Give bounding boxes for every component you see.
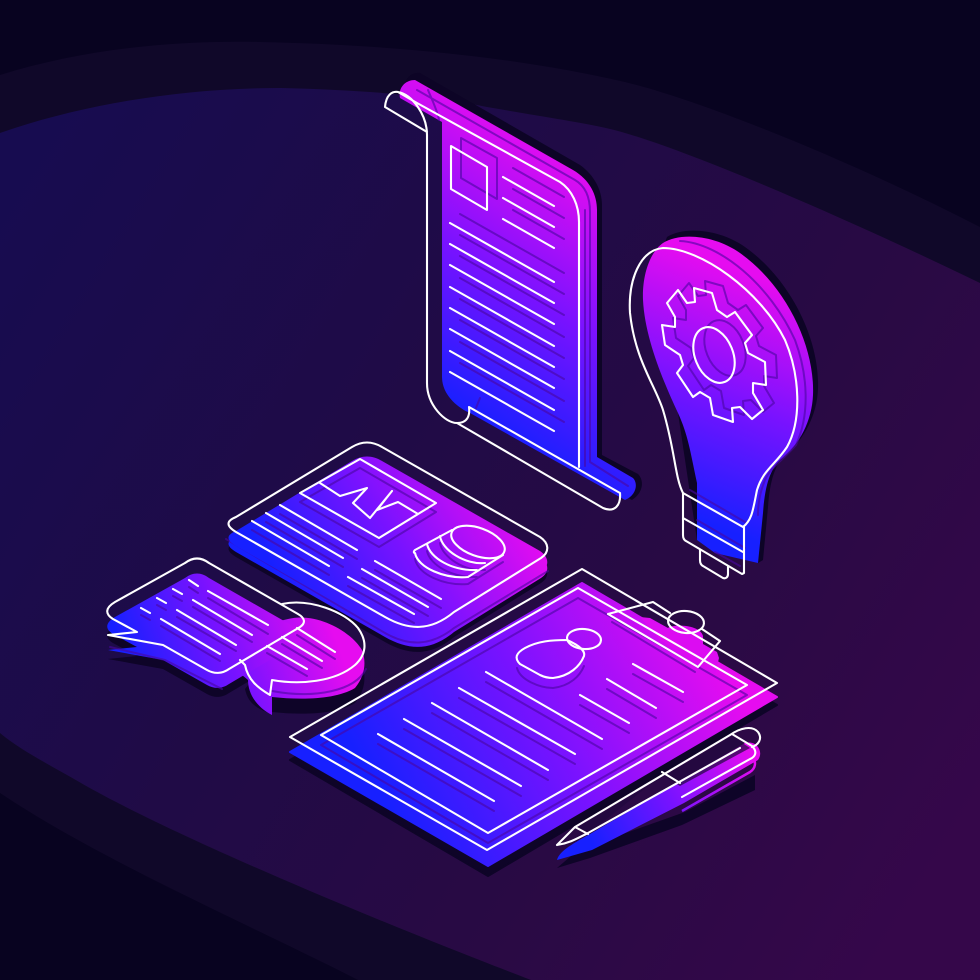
round bubble outline (240, 603, 364, 695)
scroll white outline (385, 92, 620, 510)
scroll white image block (451, 146, 487, 210)
pen outline (557, 728, 760, 845)
scroll white text lines (450, 177, 554, 431)
tablet white outline (228, 442, 547, 627)
chat bubbles (107, 558, 366, 715)
gear white (662, 288, 766, 422)
light bulb (630, 231, 818, 578)
clipboard (290, 569, 777, 876)
clipboard clip (608, 602, 720, 667)
bulb body (643, 237, 813, 563)
bulb outline (630, 248, 797, 527)
clipboard text lines (378, 664, 683, 801)
bulb screw base (683, 493, 744, 578)
clipboard dark sheet and lines (321, 598, 747, 843)
gear hole (686, 321, 742, 389)
chat layered edges (110, 647, 366, 694)
bulb shadow (643, 231, 818, 563)
chat dark lines (141, 587, 335, 676)
clipboard outer outline (290, 569, 777, 850)
tablet (226, 442, 548, 652)
tablet shadow (228, 468, 547, 652)
pen lower strip (682, 757, 755, 811)
clipboard clip fill (640, 617, 719, 675)
tablet layered edge (226, 539, 548, 643)
clipboard board (290, 583, 777, 866)
pen body (557, 743, 760, 860)
scroll layered edges (417, 90, 628, 486)
tablet coins (414, 519, 509, 584)
person icon (517, 628, 602, 678)
chat shadow (107, 582, 364, 714)
tablet base layer (228, 462, 547, 647)
tablet dark details (252, 468, 441, 623)
round bubble fill (200, 617, 364, 715)
tablet chart (300, 459, 436, 538)
scroll dark text lines (460, 168, 564, 422)
pen (557, 728, 760, 868)
scroll shadow (405, 73, 642, 500)
chat white text lines (141, 580, 335, 669)
rectangular bubble fill (107, 574, 304, 688)
scroll document (385, 73, 642, 510)
gear dark (673, 281, 777, 415)
scroll dark image block (461, 138, 497, 199)
pen shadow (557, 775, 755, 868)
clipboard sheet (321, 588, 747, 833)
rectangular bubble outline (107, 558, 304, 673)
bulb layered edges (680, 241, 806, 566)
tablet top surface (228, 456, 547, 641)
tablet text lines (252, 505, 441, 614)
clipboard shadow (290, 591, 777, 876)
pen dark gap (577, 736, 750, 832)
scroll body (400, 80, 636, 500)
